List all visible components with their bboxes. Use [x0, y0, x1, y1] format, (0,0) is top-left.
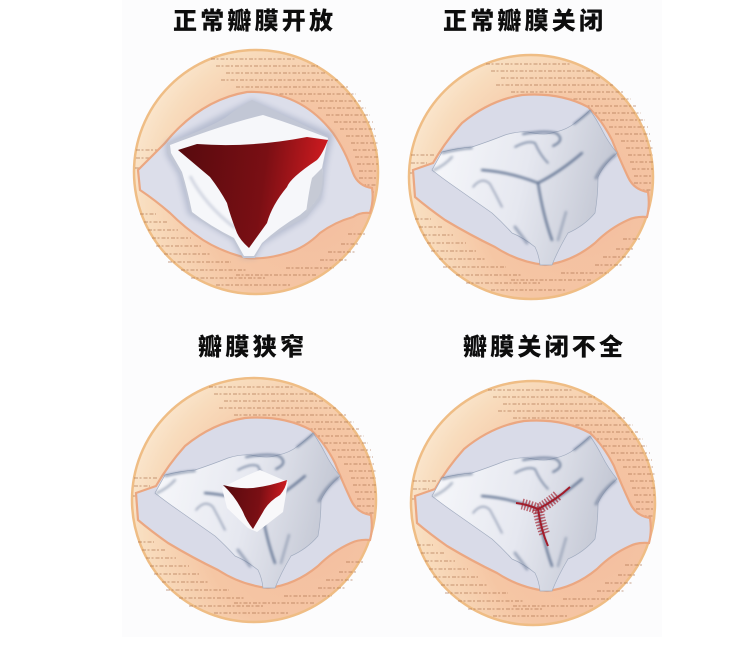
title: 瓣膜关闭不全: 瓣膜关闭不全	[463, 333, 623, 361]
vessel ring	[132, 378, 376, 622]
open leaflets	[167, 100, 328, 258]
vessel opening	[413, 94, 649, 265]
panel: normal valve closed	[409, 55, 653, 299]
valve shadow	[165, 99, 333, 258]
panel: valve stenosis	[132, 378, 376, 622]
title: 正常瓣膜关闭: 正常瓣膜关闭	[443, 8, 603, 35]
vessel ring	[134, 50, 378, 294]
regurgitant leak	[516, 487, 570, 546]
narrowed opening rim	[222, 470, 288, 532]
title: 正常瓣膜开放: 正常瓣膜开放	[173, 8, 333, 35]
background	[122, 0, 662, 637]
narrowed blood orifice	[223, 480, 287, 529]
stenotic leaflets	[155, 433, 340, 588]
vessel ring	[409, 55, 653, 299]
vessel opening	[136, 418, 372, 588]
vessel ring	[411, 381, 655, 625]
blood orifice	[178, 137, 328, 248]
vessel opening	[415, 420, 651, 591]
panel: valve regurgitation	[411, 381, 655, 625]
title: 瓣膜狭窄: 瓣膜狭窄	[198, 333, 304, 361]
panel: normal valve open	[134, 50, 378, 294]
incompletely closed leaflets	[432, 436, 617, 591]
closed leaflets	[432, 110, 617, 265]
vessel opening	[138, 92, 373, 258]
